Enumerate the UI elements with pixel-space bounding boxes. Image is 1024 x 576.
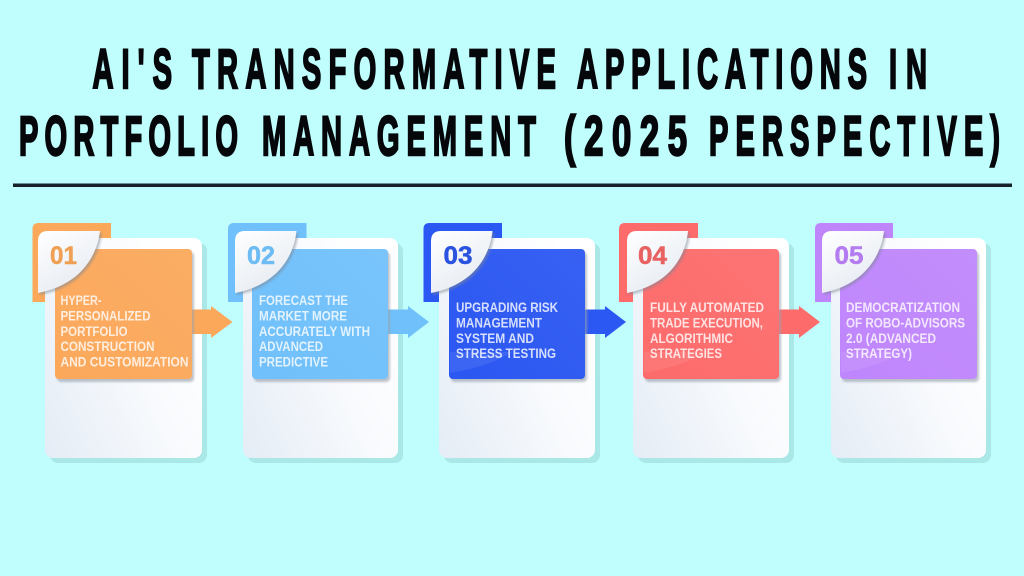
panel: step 04 — [619, 223, 820, 463]
text 02: ACCURATELY WITH — [259, 324, 370, 339]
corner curl 02 — [235, 231, 298, 295]
card 04 — [633, 238, 794, 463]
corner curl 04 — [627, 231, 690, 295]
number 05: 05 — [834, 242, 864, 270]
tab 05 — [815, 223, 893, 302]
corner curl 03 — [431, 231, 494, 295]
corner curl 05 — [822, 231, 886, 295]
arrow 01 — [190, 306, 232, 338]
text 01: PERSONALIZED — [60, 308, 151, 324]
tab 03 — [424, 223, 502, 302]
title: PORTFOLIO — [19, 106, 238, 168]
title: AI'S — [93, 39, 172, 101]
text 04 — [650, 300, 764, 361]
title: APPLICATIONS — [577, 39, 867, 101]
text 01 — [60, 293, 188, 370]
title — [19, 39, 1000, 168]
panel: step 01 — [32, 223, 232, 463]
text 02: MARKET MORE — [259, 308, 347, 324]
text 04: FULLY AUTOMATED — [650, 300, 764, 315]
card 05 — [831, 238, 991, 463]
number 01: 01 — [50, 242, 77, 270]
title: (2025 — [564, 105, 687, 167]
colour block 05 — [840, 249, 979, 382]
title: IN — [889, 39, 927, 101]
text 02: FORECAST THE — [259, 293, 348, 308]
corner curl 01 — [38, 231, 102, 295]
card 02 — [243, 238, 403, 463]
title rule — [13, 184, 1012, 187]
panel: step 02 — [228, 223, 429, 463]
colour block 04 — [643, 249, 781, 382]
text 04: TRADE EXECUTION, — [650, 316, 763, 330]
arrow 02 — [386, 306, 429, 338]
title: TRANSFORMATIVE — [192, 39, 556, 101]
text 05 — [846, 300, 965, 361]
text 04: STRATEGIES — [650, 346, 722, 361]
title: PERSPECTIVE) — [709, 106, 1000, 168]
text 01: AND CUSTOMIZATION — [60, 354, 188, 370]
text 03: MANAGEMENT — [456, 316, 543, 330]
panel: step 05 — [815, 223, 991, 463]
text 02 — [259, 293, 370, 370]
text 05: DEMOCRATIZATION — [846, 300, 960, 315]
title: MANAGEMENT — [262, 106, 536, 168]
text 01: CONSTRUCTION — [60, 339, 154, 354]
arrow 03 — [583, 306, 626, 338]
panel: step 03 — [424, 223, 626, 463]
number 04: 04 — [638, 242, 667, 270]
card 01 — [45, 238, 207, 463]
number 03: 03 — [444, 242, 472, 270]
text 02: PREDICTIVE — [259, 354, 328, 370]
text 02: ADVANCED — [259, 339, 323, 354]
colour block 03 — [449, 249, 587, 382]
colour block 02 — [252, 249, 390, 382]
tab 04 — [619, 223, 698, 302]
text 03: UPGRADING RISK — [456, 300, 558, 315]
tab 02 — [228, 223, 306, 302]
colour block 01 — [55, 249, 194, 382]
text 01: PORTFOLIO — [60, 324, 128, 339]
tab 01 — [32, 223, 111, 302]
text 03: SYSTEM AND — [456, 331, 534, 346]
text 04: ALGORITHMIC — [650, 331, 733, 346]
number 02: 02 — [247, 242, 275, 270]
text 05: OF ROBO-ADVISORS — [846, 316, 965, 330]
text 01: HYPER- — [60, 293, 102, 308]
text 05: 2.0 (ADVANCED — [846, 331, 936, 346]
card 03 — [439, 238, 600, 463]
text 03: STRESS TESTING — [456, 346, 556, 361]
text 03 — [456, 300, 558, 361]
arrow 04 — [777, 306, 820, 338]
text 05: STRATEGY) — [846, 346, 912, 361]
